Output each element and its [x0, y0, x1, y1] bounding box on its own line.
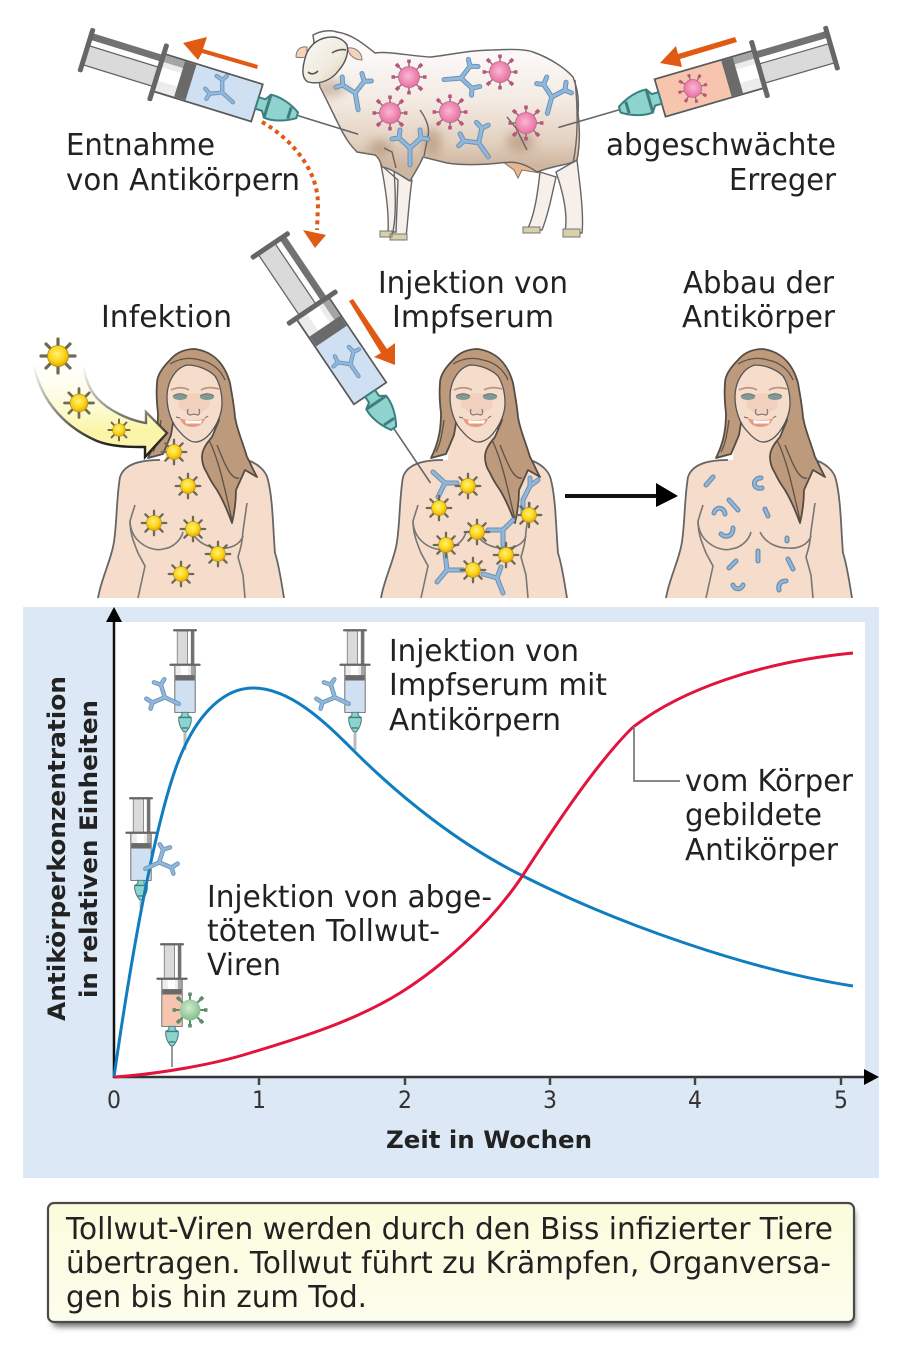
label: serum injection [389, 634, 607, 738]
label: Entnahme: Entnahme [66, 128, 215, 163]
sheep head [303, 37, 348, 83]
y axis title: in relativen Einheiten [75, 700, 103, 998]
label: Erreger: Erreger [729, 163, 837, 198]
small syringe 3 [125, 797, 157, 908]
x axis [113, 1069, 879, 1085]
label: body-made antibodies: Antikörper [685, 833, 839, 868]
x tick labels: 3 [543, 1086, 557, 1114]
leader line [634, 726, 680, 781]
label: Antikörper: Antikörper [682, 300, 836, 335]
label: body-made antibodies: gebildete [685, 798, 822, 833]
syringe: antibody extraction [75, 21, 367, 163]
label: body-made antibodies [685, 764, 854, 868]
sheep udder [503, 150, 540, 178]
x axis title: Zeit in Wochen [386, 1126, 592, 1154]
syringe: serum injection [244, 227, 455, 500]
x tick labels [107, 1086, 848, 1114]
label: Abbau der: Abbau der [683, 266, 835, 301]
x tick labels: 5 [834, 1086, 848, 1114]
curve: body antibodies [114, 653, 853, 1077]
arrow: injection direction [349, 299, 395, 365]
label: killed virus injection [207, 880, 492, 983]
x tick labels: 1 [252, 1086, 266, 1114]
label: serum injection: Impfserum mit [389, 668, 607, 703]
label: von Antikörpern: von Antikörpern [66, 163, 300, 198]
callout: rabies note: gen bis hin zum Tod. [66, 1280, 367, 1315]
small syringe 4 [156, 943, 208, 1067]
label: Infektion: Infektion [101, 300, 232, 335]
small syringe 1 [143, 629, 201, 750]
viruses bound [427, 474, 541, 582]
viruses on body [142, 440, 230, 586]
label: serum injection: Antikörpern [389, 703, 561, 738]
illustration: sheep with antigens and antibodies [296, 31, 583, 240]
sheep hooves [380, 227, 580, 240]
antibodies on sheep [334, 59, 574, 167]
y axis title: Antikörperkonzentration [43, 676, 71, 1021]
woman: serum injection [381, 349, 567, 598]
label: killed virus injection: töteten Tollwut- [207, 914, 440, 949]
sheep eye and mouth [308, 50, 346, 74]
arrow: dotted transfer [262, 122, 326, 248]
label: killed virus injection: Injektion von abge- [207, 880, 492, 915]
woman: antibody breakdown [666, 349, 852, 598]
label: serum injection: Injektion von [389, 634, 579, 669]
arrow: extraction direction [183, 37, 258, 69]
woman: infection [98, 349, 284, 598]
sheep contour details [384, 80, 577, 168]
label: body-made antibodies: vom Körper [685, 764, 854, 799]
sheep legs [381, 160, 583, 237]
sheep ears [296, 47, 362, 60]
callout: rabies note [48, 1203, 855, 1327]
arrow: infection with viruses [33, 339, 167, 457]
label: Impfserum: Impfserum [392, 300, 554, 335]
label: killed virus injection: Viren [207, 948, 281, 983]
antibody chains [433, 472, 538, 593]
chart background [23, 607, 879, 1178]
sheep shading [314, 79, 534, 156]
label: abgeschwächte: abgeschwächte [606, 128, 836, 163]
callout: rabies note: übertragen. Tollwut führt zu Krämpfen, Organversa- [66, 1246, 831, 1281]
sheep body [313, 31, 579, 181]
viruses on sheep [372, 54, 544, 140]
label: Injektion von: Injektion von [378, 266, 568, 301]
curve: serum antibodies [114, 688, 853, 1077]
y axis [106, 607, 122, 1078]
x tick labels: 2 [398, 1086, 412, 1114]
x tick labels: 0 [107, 1086, 121, 1114]
small syringe 2 [313, 629, 371, 750]
syringe: weakened pathogen [550, 19, 842, 156]
y axis title [43, 676, 103, 1021]
antibody fragments [706, 477, 793, 590]
panel: antibody chart [23, 607, 879, 1178]
x tick labels: 4 [688, 1086, 702, 1114]
antibody on syringe 3 [138, 841, 181, 884]
arrow: to breakdown [565, 483, 678, 507]
arrow: injection into sheep [660, 37, 737, 67]
callout: rabies note: Tollwut-Viren werden durch den Biss infizierter Tiere [65, 1212, 833, 1247]
